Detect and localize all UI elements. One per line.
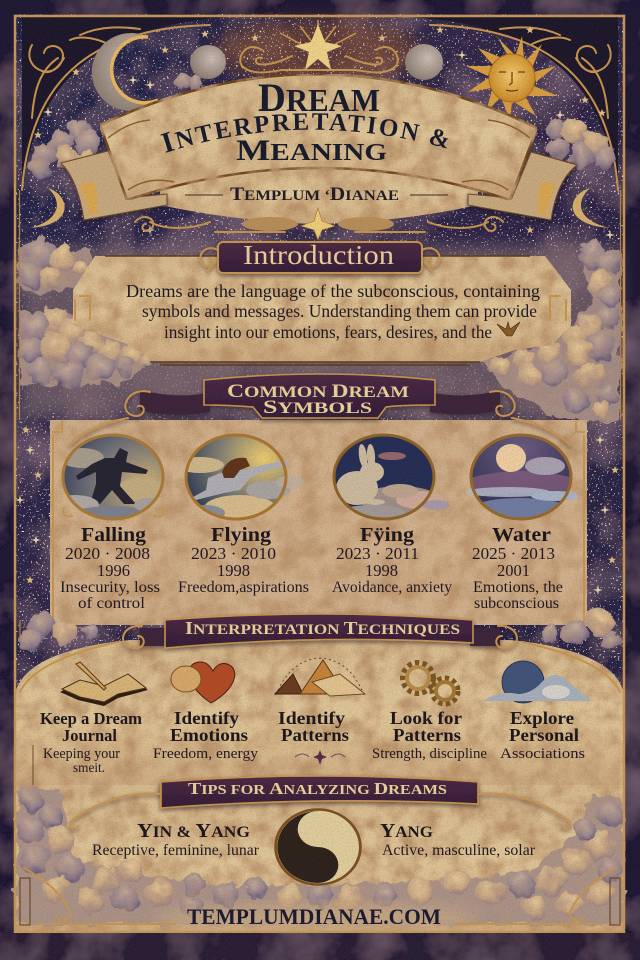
lower scroll and star [135,208,503,240]
technique: look for patterns [372,708,487,762]
title ribbon [59,74,579,224]
technique: emotions: Identify [174,708,239,728]
technique: look for patterns: Look for [390,708,462,728]
technique: emotions: Freedom, energy [153,746,259,762]
heading: INTERPRETATION & [160,113,448,153]
small crescents [30,188,610,228]
labels: fying [332,524,452,596]
technique: journal: Keeping your [43,746,120,762]
intro text: symbols and messages. Understanding them can provide [142,301,537,321]
icon: gears [404,664,457,703]
symbol: water [466,430,579,525]
panel: interpretation techniques [16,608,623,790]
intro text: Dreams are the language of the subconscious, containing [126,281,540,301]
bottom night strip [0,933,640,960]
panel: tips for analyzing dreams [16,785,624,932]
intro text [126,281,540,342]
technique: identify patterns: Patterns [281,725,349,745]
full moons [190,44,443,80]
symbol: rabbit [332,430,450,525]
technique: identify patterns [278,708,349,765]
labels: flying: 1998 [217,561,250,580]
labels: water [472,524,563,612]
ornament [295,750,345,765]
technique: emotions [153,708,259,762]
yang right label [380,820,536,859]
labels: water: 2001 [497,561,530,580]
labels: fying: 2023 · 2011 [336,544,419,563]
labels: falling: Insecurity, loss [60,579,160,596]
top star and scrollwork [240,20,398,72]
technique: look for patterns: Strength, discipline [372,746,487,762]
technique: explore associations: Personal [509,725,579,745]
icon: heart and coin [171,662,235,703]
banner: common dream symbols: SYMBOLS [263,397,372,418]
yin and yang left label [92,820,260,859]
ribbon tails [61,151,577,220]
heading: DREAM [258,75,380,120]
labels: falling: Falling [81,524,146,546]
corner filigree: top [16,16,624,190]
labels: water: Emotions, the [473,579,563,596]
technique: explore associations: Associations [500,746,585,762]
yin and yang left label: Receptive, feminine, lunar [92,842,260,859]
labels: water: 2025 · 2013 [472,544,555,563]
labels: flying: Freedom,aspirations [178,579,309,596]
labels: fying: Fÿing [360,524,414,546]
labels: flying: 2023 · 2010 [191,544,276,563]
banner: introduction: Introduction [243,240,395,270]
technique: journal: Journal [62,726,117,745]
icon: bird [497,322,520,336]
yin and yang left label: YIN & YANG [137,820,251,842]
subtitle: TEMPLUM ‘ DIANAE [230,184,399,205]
subtitle backing parchment [160,165,478,224]
banner: common dream symbols [70,374,570,445]
labels: water: Water [492,524,551,546]
banner: introduction [200,240,440,273]
crescent moon [92,33,158,111]
lower clouds [16,787,624,925]
technique: explore associations [500,708,585,762]
panel: introduction [73,256,571,365]
labels: fying: Avoidance, anxiety [332,579,452,596]
heading: M EANING [236,134,387,167]
symbol: flying [184,434,304,520]
labels: falling [60,524,160,612]
technique: look for patterns: Patterns [393,725,461,745]
labels: water: subconscious [474,595,559,612]
yang right label: Active, masculine, solar [382,842,536,859]
yin yang emblem [276,810,360,884]
banner: tips for analyzing dreams: TIPS FOR ANALYZING DREAMS [188,779,447,798]
labels: flying [178,524,309,596]
dusk haze [20,246,620,418]
technique: identify patterns: Identify [278,708,345,728]
technique: journal [40,709,142,776]
banner: interpretation techniques [123,614,517,648]
website footer: TEMPLUMDIANAE.COM [187,904,441,929]
technique: explore associations: Explore [510,708,574,728]
technique: emotions: Emotions [170,725,248,745]
stars in the sky [15,26,619,595]
icon: open book and quill [60,662,148,706]
labels: flying: Flying [211,524,271,546]
labels: fying: 1998 [365,561,398,580]
labels: falling: of control [78,595,145,612]
bottom corners [20,868,620,925]
icon: pyramids and map [275,658,365,696]
clouds around introduction [16,239,621,420]
labels: falling: 1996 [97,561,130,580]
yang right label: YANG [380,820,434,842]
symbol: falling [62,434,164,520]
banner: tips for analyzing dreams [70,776,570,828]
banner: interpretation techniques: INTERPRETATION TECHNIQUES [185,618,460,638]
sun with face [466,36,558,120]
icon: orb and clouds [483,661,592,703]
clouds beside the title [30,74,616,178]
labels: falling: 2020 · 2008 [65,544,150,563]
intro text: insight into our emotions, fears, desires, and the [164,322,492,342]
clouds flanking banner [20,608,622,650]
technique: journal: Keep a Dream [40,709,142,728]
banner: common dream symbols: COMMON DREAM [227,381,409,402]
panel: common dream symbols [50,420,587,625]
footer strip [156,905,476,931]
heading [160,75,448,167]
technique: journal: smeit. [73,761,105,776]
main banner [100,74,537,200]
